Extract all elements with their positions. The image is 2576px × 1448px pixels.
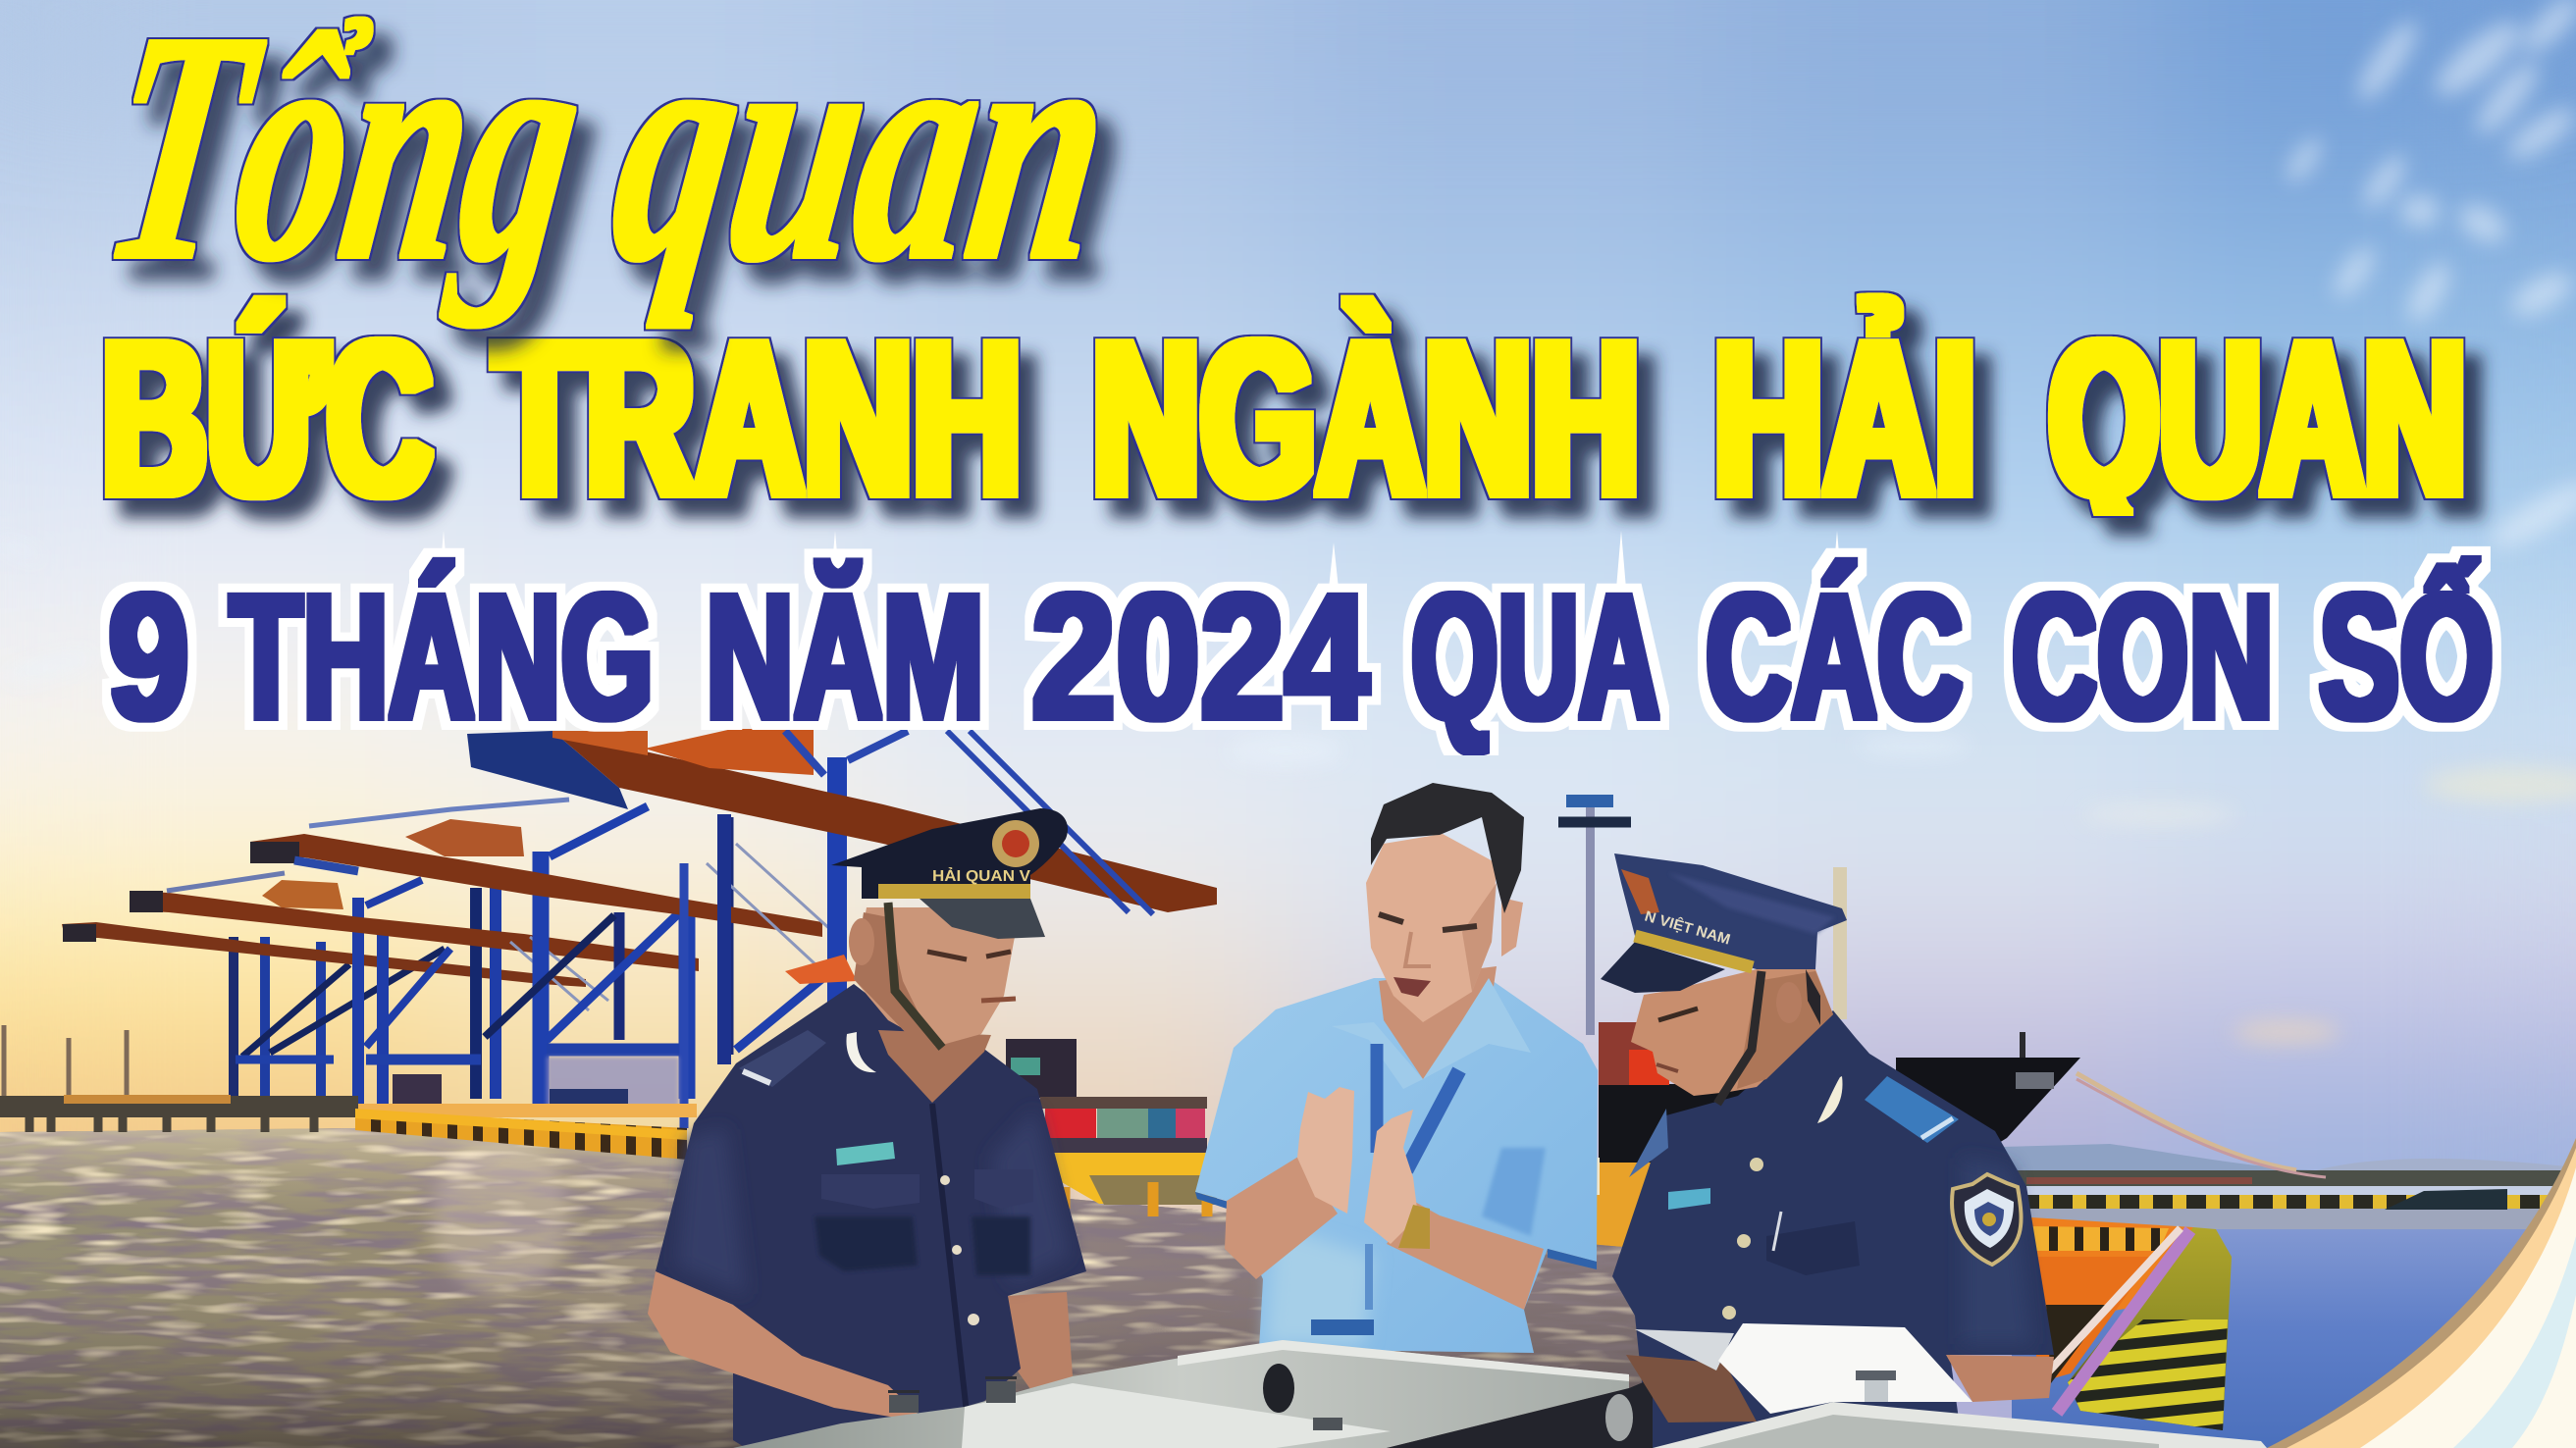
crane 3 [130,873,699,1104]
subtitle: 9 tháng năm 2024 qua các con số: 9 [108,556,189,756]
white paper and tablet [1626,1323,1972,1422]
crane 1 [467,729,1217,1128]
collar [1332,978,1531,1089]
subtitle: 9 tháng năm 2024 qua các con số: SỐ [2319,556,2494,756]
quay left [0,1095,1217,1216]
gantry machinery and small spreader [236,955,857,1117]
right arm [1008,1292,1073,1389]
sleeve shield [1952,1174,2022,1265]
shore lamps [4,1025,127,1101]
uniform [1612,1010,2054,1448]
name badge [1668,1188,1710,1210]
ear [1501,898,1523,957]
ear [1776,982,1802,1023]
sea and harbour on the right [2012,1186,2576,1448]
badge [836,1142,895,1165]
pocket and buttons [1766,1221,1860,1275]
heading: bức tranh ngành hải quan [102,294,2466,542]
hair [1371,783,1524,913]
officer right [1601,853,2054,1448]
heading: bức tranh ngành hải quan: NGÀNH [1092,294,1640,542]
heading: bức tranh ngành hải quan: TRANH [494,294,1022,542]
script title: tổng quan [88,0,1129,329]
neck and face [1644,969,1833,1096]
shirt [1195,978,1598,1353]
crane 2 [250,800,844,1104]
left arm [648,1271,927,1422]
uniform [656,984,1086,1448]
left forearm and hand [1225,1157,1338,1279]
cap [831,808,1068,939]
corner swoosh [2267,1138,2576,1448]
collar insignia [846,1032,876,1072]
epaulette [1865,1076,1959,1143]
pockets [821,1169,1033,1209]
watch [1398,1205,1430,1249]
ear [849,918,874,965]
subtitle: 9 tháng năm 2024 qua các con số: QUA [1411,556,1659,756]
strap [888,903,942,1048]
neck [878,1030,991,1103]
officer left [648,808,1086,1448]
distant shoreline and mountains [2002,1144,2576,1186]
epaulette [739,1030,826,1087]
container cranes [62,729,1217,1128]
clouds [0,0,2576,1044]
neck [1379,966,1497,1079]
cap label: HẢI QUAN V [932,866,1030,885]
cargo ship [1599,867,2326,1207]
officer centre [1195,783,1598,1353]
collar insignia [1817,1076,1843,1123]
heading: bức tranh ngành hải quan: BỨC [102,294,432,542]
orange wharf and striped quay [1580,1158,2232,1430]
equipment box right [1653,1370,2267,1448]
water with reflections [0,1128,1668,1448]
equipment box centre-left [733,1340,1653,1448]
right forearm and hand [1387,1201,1544,1310]
white outline spikes [439,531,1842,589]
subtitle: 9 tháng năm 2024 qua các con số: NĂM [706,556,984,756]
arm [1946,1355,2054,1402]
lanyard [1370,1044,1384,1153]
face [1366,834,1497,1022]
subtitle: 9 tháng năm 2024 qua các con số: THÁNG [230,556,654,756]
strap [1717,971,1761,1104]
cap label: N VIỆT NAM [1643,907,1732,949]
heading: bức tranh ngành hải quan: HẢI [1713,294,1976,542]
cap [1601,853,1847,993]
subtitle: 9 tháng năm 2024 qua các con số: CON [2012,556,2274,756]
stacked containers behind officers [1006,1039,1207,1153]
subtitle: 9 tháng năm 2024 qua các con số: 2024 [1031,556,1369,756]
crane 4 [62,922,586,1104]
subtitle: 9 tháng năm 2024 qua các con số [108,556,2494,756]
subtitle: 9 tháng năm 2024 qua các con số: CÁC [1706,556,1963,756]
light mast [1558,795,1631,1035]
face [854,907,1021,1047]
